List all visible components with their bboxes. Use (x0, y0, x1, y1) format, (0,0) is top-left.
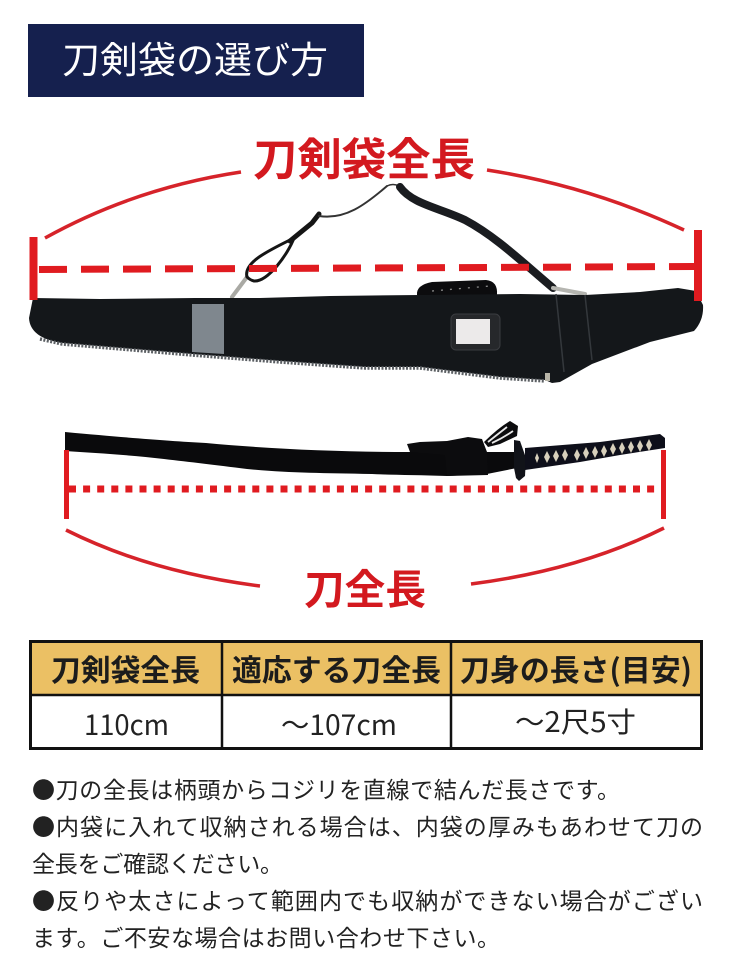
title banner: 刀剣袋の選び方 (62, 30, 328, 84)
table value: bag length: 110cm (84, 704, 169, 744)
bag measurement: dashed line (39, 266, 694, 270)
arc: katana length left (66, 530, 260, 586)
tassels (484, 421, 518, 447)
hilt diamonds (535, 439, 652, 463)
leather patch (192, 304, 224, 354)
scabbard (65, 432, 517, 476)
katana (65, 421, 665, 481)
arc: bag length right (487, 170, 684, 230)
sageo cord knot (407, 437, 488, 476)
bag measurement: left tick (30, 237, 38, 300)
note line 4: ●反りや太さによって範囲内でも収納ができない場合がござい (32, 882, 703, 916)
size table (30, 641, 702, 749)
table header: blade length: 刀身の長さ(目安) (460, 646, 692, 690)
arc: bag length left (45, 172, 241, 238)
note line 3: 全長をご確認ください。 (32, 845, 283, 879)
table header: compatible length: 適応する刀全長 (232, 646, 441, 690)
bag measurement: right tick (694, 230, 702, 301)
notes (32, 771, 703, 953)
name window (451, 314, 500, 350)
bag handle (417, 280, 497, 295)
tsuba guard (514, 440, 526, 481)
note line 5: ます。ご不安な場合はお問い合わせ下さい。 (32, 919, 500, 953)
table value: compatible length: ～107cm (281, 704, 397, 744)
table value: blade length: ～2尺5寸 (515, 701, 636, 741)
shoulder strap (232, 184, 585, 297)
katana measurement: dotted line (69, 486, 662, 492)
zipper end (545, 373, 550, 381)
hilt (525, 434, 665, 470)
arc: katana length right (471, 528, 664, 584)
table header: bag length: 刀剣袋全長 (51, 646, 200, 690)
title banner (28, 24, 364, 97)
katana measurement: right tick (661, 450, 666, 519)
note line 1: ●刀の全長は柄頭からコジリを直線で結んだ長さです。 (32, 771, 620, 805)
katana measurement: left tick (64, 450, 69, 519)
heading: bag total length: 刀剣袋全長 (253, 123, 475, 188)
note line 2: ●内袋に入れて収納される場合は、内袋の厚みもあわせて刀の (32, 808, 703, 842)
sword bag (29, 288, 703, 383)
heading: katana total length: 刀全長 (304, 556, 426, 616)
